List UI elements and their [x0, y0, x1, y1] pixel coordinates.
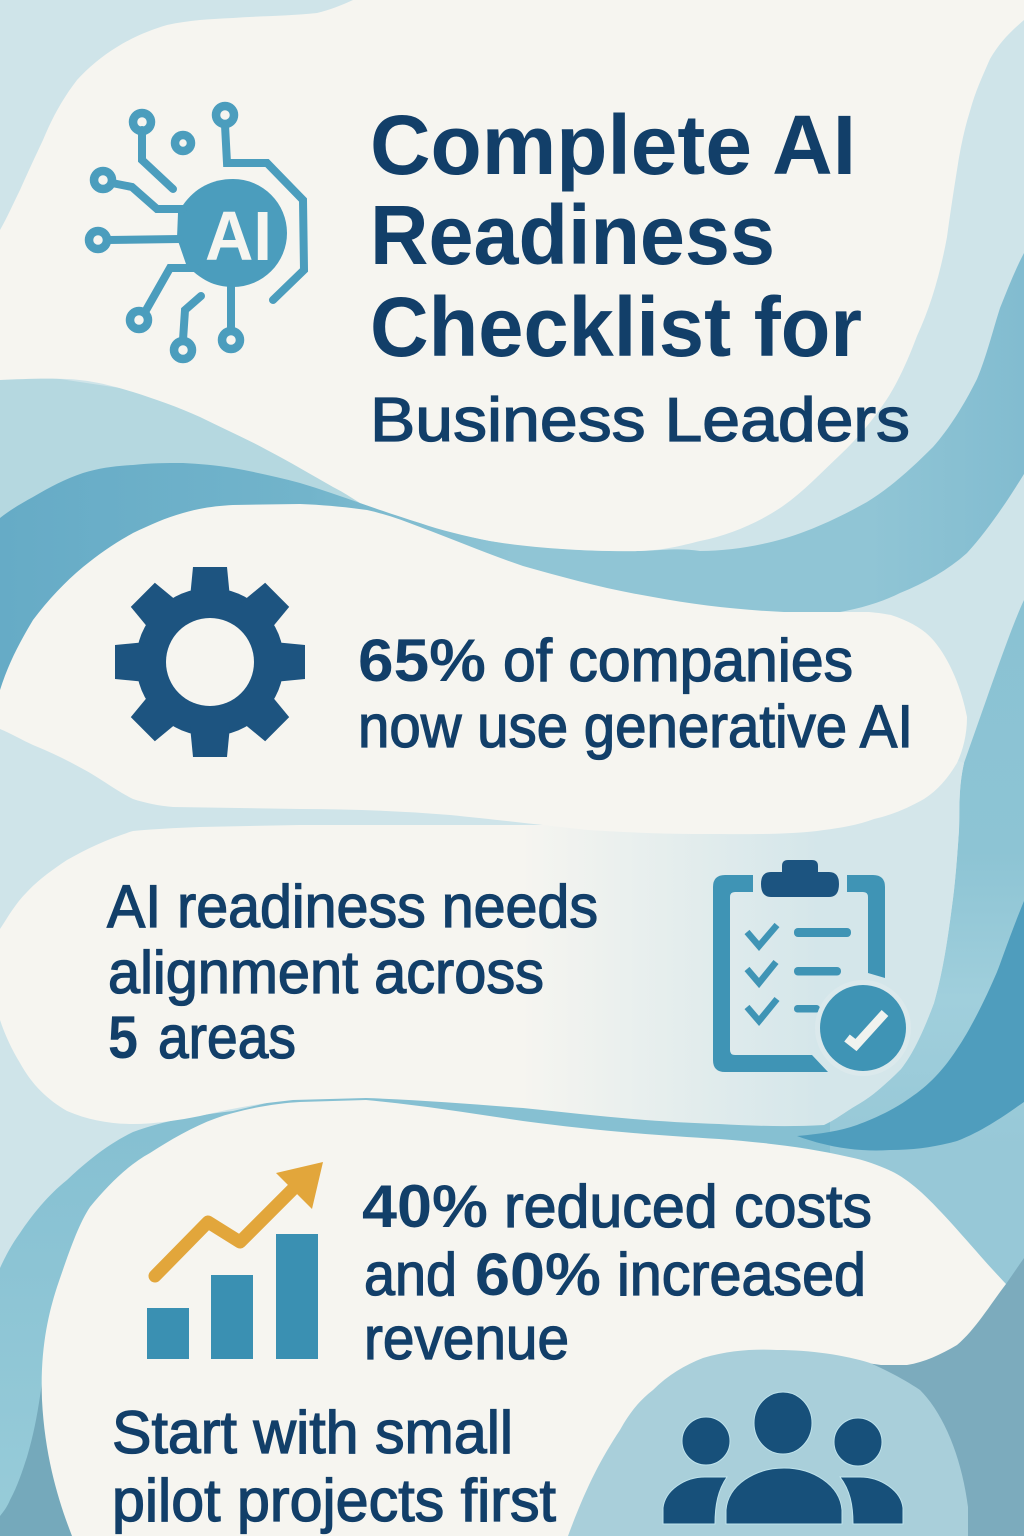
- clipboard frame: [713, 875, 885, 1072]
- rising arrow: [155, 1162, 323, 1276]
- panel: alignment background: [0, 700, 964, 1126]
- text: cost and revenue: and: [364, 1241, 457, 1308]
- panel: results and pilot background: [42, 1100, 1006, 1536]
- checklist checks: [747, 925, 777, 1021]
- AI label: AI: [205, 197, 272, 275]
- panel: team blob: [568, 1350, 968, 1536]
- text: pilot projects: Start with small: [112, 1399, 513, 1466]
- title: [370, 98, 910, 455]
- text: 65% of companies: of companies: [503, 627, 853, 694]
- circuit traces: [108, 125, 304, 340]
- text: cost and revenue: increased: [617, 1241, 866, 1308]
- circuit chip: [177, 179, 287, 287]
- text: 65% of companies: now use generative AI: [358, 693, 913, 760]
- checklist bars: [794, 928, 851, 1012]
- text: cost and revenue: revenue: [364, 1305, 569, 1372]
- clipboard clip: [761, 860, 839, 897]
- icon: clipboard: [713, 860, 911, 1076]
- bars: [147, 1234, 318, 1359]
- text: AI readiness: AI readiness needs: [107, 873, 598, 940]
- title: Checklist for: [370, 280, 862, 374]
- icon: growth chart: [147, 1162, 323, 1359]
- check badge: [815, 980, 911, 1076]
- text: cost and revenue: reduced costs: [504, 1173, 872, 1240]
- text: pilot projects: [112, 1399, 556, 1534]
- text: cost and revenue: 40%: [362, 1173, 488, 1240]
- text: AI readiness: alignment across: [108, 939, 544, 1006]
- circuit nodes: [89, 106, 240, 359]
- text: AI readiness: 5: [108, 1004, 138, 1071]
- icon: team: [663, 1392, 903, 1524]
- text: AI readiness: areas: [158, 1004, 296, 1071]
- panel: generative AI background: [0, 504, 967, 834]
- text: cost and revenue: [362, 1173, 872, 1372]
- text: 65% of companies: 65%: [358, 627, 486, 694]
- title: Complete AI: [370, 98, 856, 192]
- icon: AI circuit: [89, 106, 304, 359]
- text: 65% of companies: [358, 627, 913, 760]
- title: Readiness: [370, 188, 775, 282]
- panel: title background: [0, 0, 1024, 551]
- title: Business Leaders: [370, 386, 910, 455]
- text: AI readiness: [107, 873, 598, 1071]
- text: pilot projects: pilot projects first: [112, 1467, 556, 1534]
- text: cost and revenue: 60%: [475, 1241, 601, 1308]
- icon: gear: [115, 567, 305, 757]
